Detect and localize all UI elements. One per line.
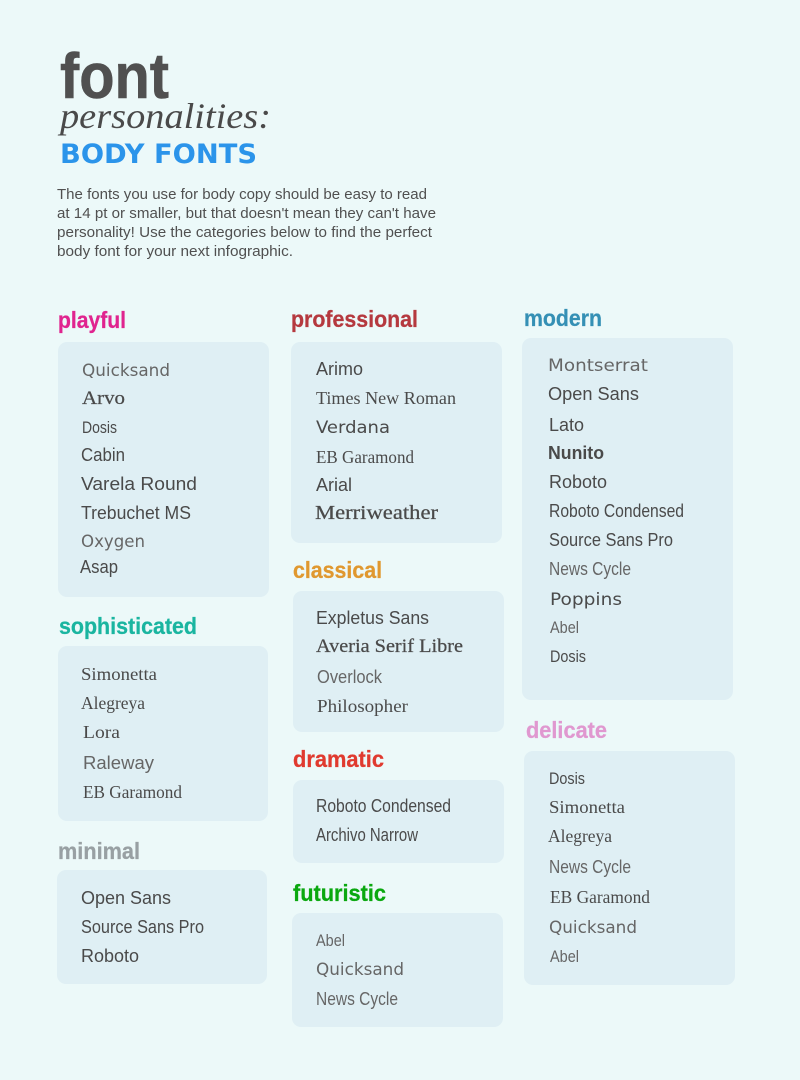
- font list: professional: [315, 359, 456, 524]
- card: delicate: [524, 751, 735, 985]
- subtitle: personalities: personalities:: [57, 96, 271, 136]
- font list: delicate: EB Garamond: [550, 887, 650, 907]
- panel: playful: [58, 307, 269, 597]
- title: font: font: [60, 40, 169, 112]
- font list: modern: Montserrat: [548, 356, 649, 375]
- heading: body fonts: BODY FONTS: [60, 139, 257, 170]
- font list: sophisticated: EB Garamond: [83, 782, 182, 802]
- intro paragraph: personality! Use the categories below to find the perfect: [57, 225, 432, 241]
- card: professional: [291, 342, 502, 543]
- font list: classical: Averia Serif Libre: [316, 636, 463, 657]
- heading: futuristic: futuristic: [293, 880, 386, 906]
- heading: modern: modern: [524, 305, 602, 331]
- font list: modern: Abel: [550, 618, 579, 637]
- card: classical: [293, 591, 504, 732]
- font list: futuristic: Quicksand: [316, 960, 404, 979]
- font list: minimal: [81, 888, 204, 966]
- font list: playful: Asap: [80, 557, 118, 577]
- font list: professional: Times New Roman: [316, 388, 456, 408]
- font list: sophisticated: Raleway: [83, 753, 154, 773]
- panel: professional: [291, 306, 502, 543]
- card: minimal: [57, 870, 267, 984]
- font list: delicate: Dosis: [549, 769, 585, 788]
- panel: classical: [293, 557, 504, 732]
- font list: classical: Expletus Sans: [316, 608, 429, 628]
- panel: dramatic: [293, 746, 504, 863]
- font list: playful: Varela Round: [81, 474, 197, 494]
- font list: modern: Open Sans: [548, 384, 639, 404]
- panel: futuristic: [292, 880, 503, 1027]
- font list: modern: Lato: [549, 415, 584, 435]
- font list: professional: Arimo: [316, 359, 363, 379]
- card: dramatic: [293, 780, 504, 863]
- font list: sophisticated: Lora: [83, 722, 120, 742]
- font list: classical: Overlock: [317, 667, 383, 687]
- intro paragraph: The fonts you use for body copy should be easy to read: [57, 187, 427, 203]
- font list: professional: Verdana: [316, 418, 390, 437]
- font list: modern: [548, 356, 684, 666]
- heading: sophisticated: sophisticated: [59, 613, 197, 639]
- panel: sophisticated: [58, 613, 268, 821]
- font list: delicate: [548, 769, 650, 966]
- font list: playful: Cabin: [81, 445, 125, 465]
- font list: minimal: Source Sans Pro: [81, 917, 204, 937]
- heading: professional: professional: [291, 306, 418, 332]
- font list: playful: Oxygen: [81, 532, 145, 551]
- font list: delicate: Quicksand: [549, 918, 637, 937]
- intro paragraph: at 14 pt or smaller, but that doesn't mean they can't have: [57, 206, 436, 222]
- font list: delicate: Alegreya: [548, 826, 612, 846]
- font list: professional: Arial: [316, 475, 352, 495]
- font list: dramatic: Archivo Narrow: [316, 825, 419, 845]
- card: playful: [58, 342, 269, 597]
- font list: futuristic: News Cycle: [316, 989, 398, 1009]
- font list: playful: Trebuchet MS: [81, 503, 191, 523]
- font list: modern: Poppins: [550, 590, 622, 609]
- font list: minimal: Open Sans: [81, 888, 171, 908]
- intro paragraph: [57, 187, 436, 260]
- font list: delicate: Abel: [550, 947, 579, 966]
- card: modern: [522, 338, 733, 700]
- font list: delicate: News Cycle: [549, 857, 631, 877]
- font list: playful: [80, 361, 197, 577]
- intro paragraph: body font for your next infographic.: [57, 244, 293, 260]
- font list: modern: Roboto: [549, 472, 607, 492]
- card: futuristic: [292, 913, 503, 1027]
- font list: modern: Dosis: [550, 647, 586, 666]
- font list: modern: Roboto Condensed: [549, 501, 684, 521]
- font list: dramatic: Roboto Condensed: [316, 796, 451, 816]
- font list: classical: [316, 608, 463, 716]
- heading: minimal: minimal: [58, 838, 140, 864]
- font list: minimal: Roboto: [81, 946, 139, 966]
- font list: futuristic: [316, 931, 404, 1009]
- heading: playful: playful: [58, 307, 126, 333]
- font list: dramatic: [316, 796, 451, 845]
- font list: sophisticated: Alegreya: [81, 693, 145, 713]
- title block: [57, 40, 271, 170]
- font list: delicate: Simonetta: [549, 797, 625, 817]
- panel: delicate: [524, 717, 735, 985]
- card: sophisticated: [58, 646, 268, 821]
- font list: modern: Source Sans Pro: [549, 530, 673, 550]
- font list: playful: Quicksand: [82, 361, 170, 380]
- font list: sophisticated: [81, 664, 182, 802]
- font list: professional: Merriweather: [315, 502, 438, 524]
- font list: playful: Arvo: [82, 388, 125, 409]
- font list: sophisticated: Simonetta: [81, 664, 157, 684]
- panel: minimal: [57, 838, 267, 984]
- font list: futuristic: Abel: [316, 931, 345, 950]
- heading: classical: classical: [293, 557, 382, 583]
- font list: modern: News Cycle: [549, 559, 631, 579]
- font list: playful: Dosis: [82, 418, 117, 437]
- font list: professional: EB Garamond: [316, 447, 414, 467]
- panel: modern: [522, 305, 733, 700]
- heading: delicate: delicate: [526, 717, 607, 743]
- heading: dramatic: dramatic: [293, 746, 384, 772]
- font list: modern: Nunito: [548, 443, 604, 463]
- font list: classical: Philosopher: [317, 696, 408, 716]
